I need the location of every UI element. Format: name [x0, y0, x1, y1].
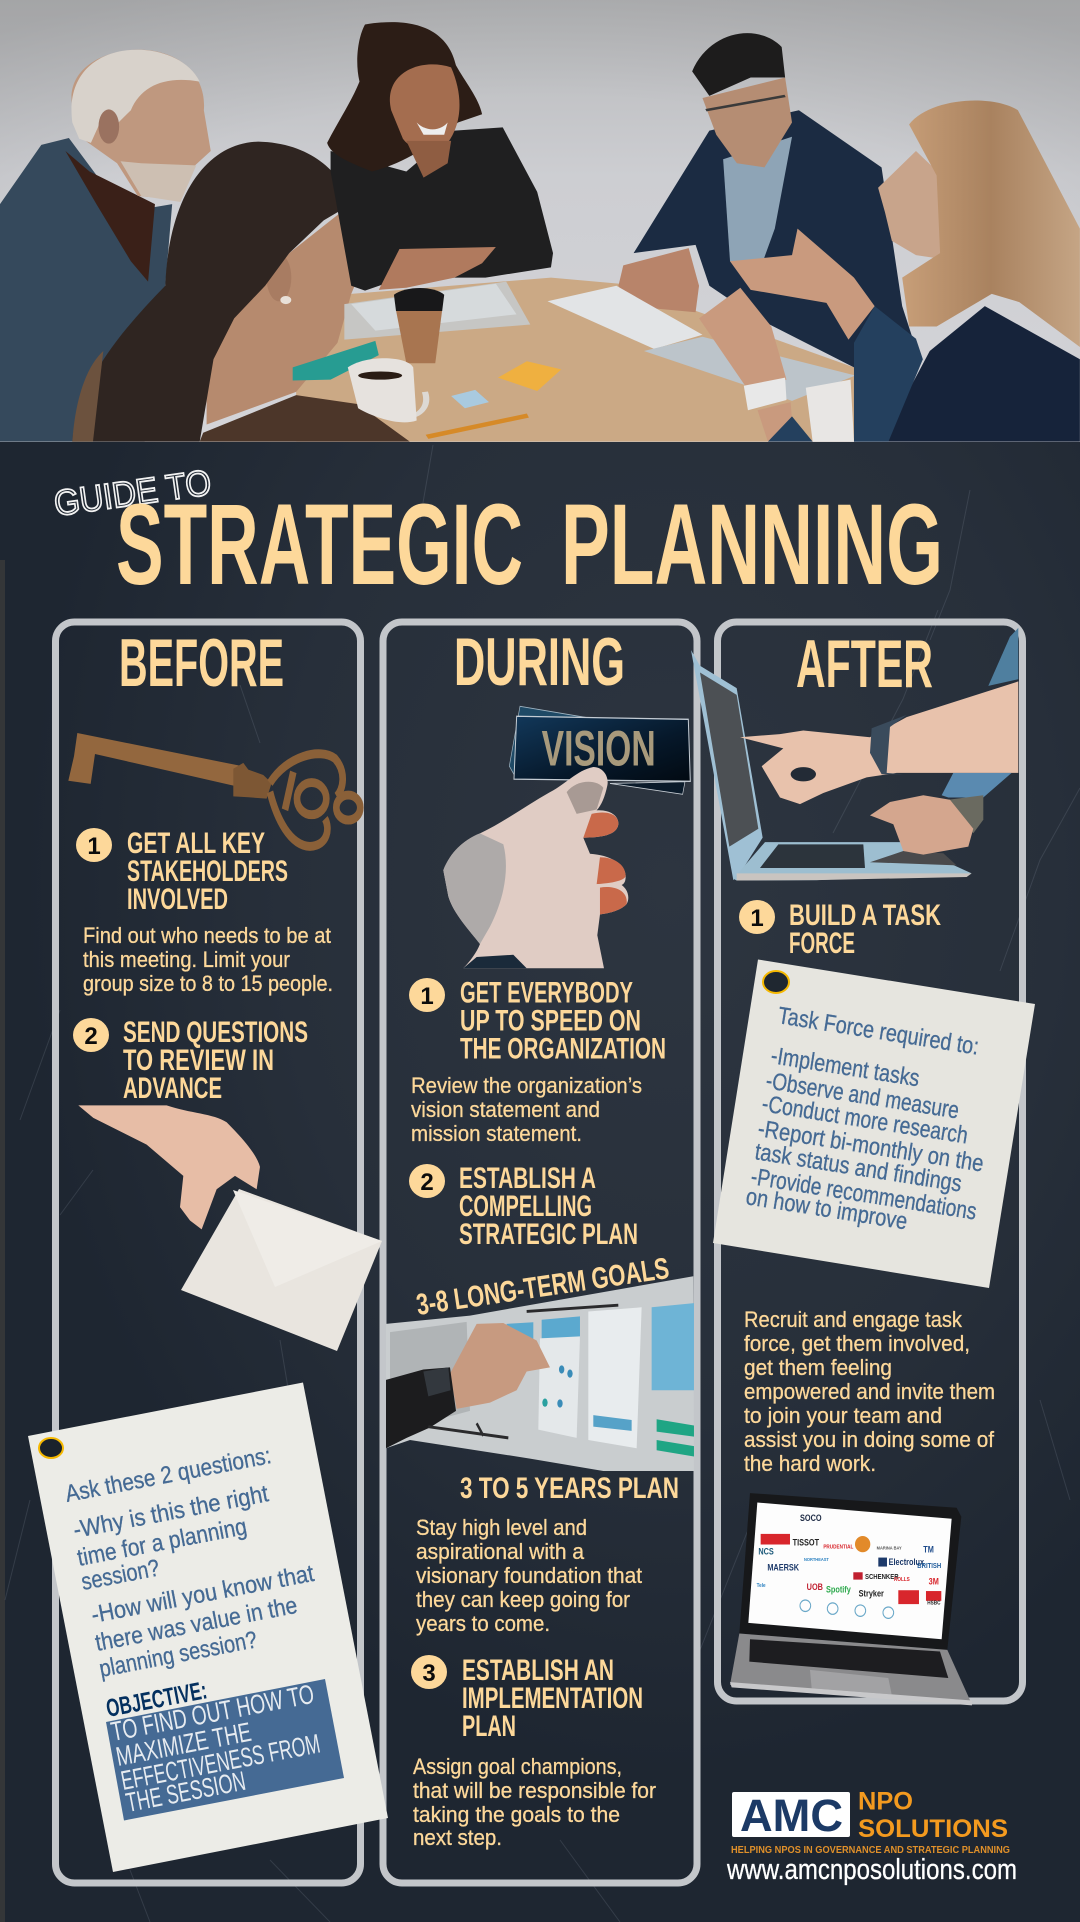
subheading: 3 to 5 years plan: 3 TO 5 YEARS PLAN	[460, 1472, 679, 1505]
step 2 heading: ESTABLISH A	[459, 1162, 596, 1195]
body: recruit and engage: assist you in doing some of	[744, 1427, 995, 1452]
papers and cups on table	[293, 282, 855, 442]
body: recruit and engage: empowered and invite them	[744, 1379, 995, 1404]
image: hand holding vision card: VISION	[542, 722, 656, 776]
note questions: time for a planning	[75, 1513, 249, 1572]
step 1 badge: 1	[750, 905, 764, 932]
icon: antique key	[68, 733, 360, 846]
step 2 heading	[123, 1016, 308, 1105]
logo wordmark: AMC	[740, 1790, 843, 1841]
step 1 heading: THE ORGANIZATION	[460, 1032, 666, 1066]
note: task force required	[713, 960, 1035, 1288]
pin hole	[763, 971, 789, 993]
objective label: OBJECTIVE:	[104, 1676, 209, 1723]
pin hole	[39, 1438, 63, 1458]
step 1 heading	[460, 976, 666, 1066]
step 1 badge	[739, 900, 775, 934]
title word: strategic: STRATEGIC	[116, 481, 523, 609]
objective box: EFFECTIVENESS FROM	[119, 1729, 323, 1796]
step 1 badge	[76, 828, 112, 862]
step 3 body: next step.	[413, 1825, 502, 1850]
image: hand holding envelope	[78, 1105, 382, 1351]
image: laptop showing client logos: Spotify	[826, 1585, 851, 1594]
step 2 badge	[409, 1164, 445, 1198]
step 1 body	[83, 923, 333, 996]
image: laptop showing client logos: ROLLS	[894, 1577, 910, 1583]
image: laptop showing client logos: Stryker	[859, 1589, 885, 1599]
plan body: they can keep going for	[416, 1587, 630, 1612]
body: recruit and engage: get them feeling	[744, 1355, 892, 1380]
note: questions to ask	[28, 1382, 388, 1872]
objective box: THE SESSION	[124, 1766, 248, 1818]
objective box: TO FIND OUT HOW TO	[109, 1679, 316, 1747]
step 2 badge: 2	[84, 1023, 98, 1050]
panel: after	[691, 622, 1035, 1705]
title	[51, 461, 943, 609]
step 2 heading	[459, 1162, 638, 1251]
logo text: solutions: SOLUTIONS	[858, 1815, 1008, 1843]
note questions: session?	[79, 1555, 162, 1596]
woman on right, blond hair	[699, 101, 1080, 442]
image: laptop showing client logos: 3M	[929, 1577, 939, 1587]
image: laptop showing client logos: NCS	[758, 1547, 774, 1557]
note list: task status and findings	[753, 1138, 964, 1198]
image: hand holding vision card	[443, 706, 690, 968]
heading: during: DURING	[454, 624, 625, 700]
image: laptop showing client logos: PRUDENTIAL	[823, 1544, 854, 1551]
plan body: Stay high level and	[416, 1515, 587, 1540]
step 2 heading: TO REVIEW IN	[123, 1044, 274, 1077]
step 1 heading: GET ALL KEY	[127, 827, 265, 860]
image: laptop showing client logos: MAERSK	[767, 1563, 799, 1573]
step 1 body: Review the organization’s	[411, 1073, 642, 1098]
step 3 heading: ESTABLISH AN	[462, 1654, 614, 1687]
step 2 badge: 2	[420, 1169, 434, 1196]
note list: -Report bi-monthly on the	[756, 1115, 985, 1178]
panel: during	[383, 622, 697, 1883]
panel border: after	[718, 622, 1022, 1701]
note list: on how to improve	[744, 1183, 909, 1235]
man on right	[618, 33, 919, 442]
note list: -Implement tasks	[769, 1042, 921, 1092]
note paper	[28, 1382, 388, 1872]
step 1 badge	[409, 978, 445, 1012]
step 1 body: group size to 8 to 15 people.	[83, 971, 333, 996]
body: recruit and engage	[744, 1307, 995, 1476]
step 3 badge: 3	[422, 1660, 436, 1687]
note list: -Provide recommendations	[749, 1163, 978, 1226]
step 3 body: that will be responsible for	[413, 1778, 656, 1803]
label: long-term goals: 3-8 LONG-TERM GOALS	[414, 1252, 671, 1322]
step 2 heading: SEND QUESTIONS	[123, 1016, 308, 1049]
image: laptop showing client logos: SCHENKER	[865, 1573, 899, 1581]
note questions: Ask these 2 questions:	[63, 1442, 273, 1508]
step 3 heading	[462, 1654, 643, 1743]
image: laptop showing client logos	[730, 1493, 972, 1705]
step 1 body: mission statement.	[411, 1121, 582, 1146]
title line: guide to: GUIDE TO	[51, 461, 214, 524]
man on left	[0, 50, 211, 442]
image: laptop showing client logos: HSBC	[927, 1600, 941, 1607]
step 3 heading: PLAN	[462, 1710, 516, 1743]
step 2 badge	[73, 1018, 109, 1052]
step 3 body	[413, 1754, 656, 1850]
step 3 body: Assign goal champions,	[413, 1754, 622, 1779]
step 1 body: this meeting. Limit your	[83, 947, 290, 972]
objective box: MAXIMIZE THE	[114, 1717, 254, 1772]
step 1 heading: GET EVERYBODY	[460, 976, 633, 1010]
body: recruit and engage: to join your team and	[744, 1403, 942, 1428]
tagline: HELPING NPOS IN GOVERNANCE AND STRATEGIC PLANNING	[731, 1844, 1010, 1856]
image: laptop showing client logos: BRITISH	[917, 1562, 941, 1570]
woman in centre	[327, 22, 553, 291]
note questions: planning session?	[97, 1626, 259, 1683]
heading: before: BEFORE	[119, 625, 284, 701]
note questions: -How will you know that	[89, 1560, 316, 1629]
logo badge	[732, 1792, 850, 1837]
body: recruit and engage: force, get them involved,	[744, 1331, 970, 1356]
note list: Task Force required to:	[776, 1002, 981, 1061]
plan body: aspirational with a	[416, 1539, 585, 1564]
image: laptop showing client logos: Tele	[757, 1583, 766, 1589]
step 1 badge: 1	[87, 833, 101, 860]
objective box	[106, 1679, 344, 1820]
image: hand pinning plans on a board	[386, 1276, 694, 1471]
website: www.amcnposolutions.com	[726, 1854, 1017, 1886]
step 1 body: vision statement and	[411, 1097, 600, 1122]
step 3 heading: IMPLEMENTATION	[462, 1682, 643, 1715]
image: laptop showing client logos: TM	[923, 1545, 934, 1555]
image: laptop showing client logos: UOB	[807, 1583, 823, 1592]
step 1 heading: FORCE	[789, 927, 855, 960]
image: laptop showing client logos: TISSOT	[793, 1538, 819, 1548]
step 3 badge	[411, 1655, 447, 1689]
step 1 heading: STAKEHOLDERS	[127, 855, 288, 888]
panel: before	[28, 622, 388, 1883]
step 1 body	[411, 1073, 642, 1146]
step 1 heading: UP TO SPEED ON	[460, 1004, 641, 1038]
step 3 body: taking the goals to the	[413, 1802, 620, 1827]
image: laptop showing client logos: MARINA BAY	[877, 1545, 902, 1551]
step 1 heading	[127, 827, 288, 916]
heading: after: AFTER	[796, 626, 933, 702]
image: hands pointing at laptop	[691, 628, 1018, 881]
step 1 heading: INVOLVED	[127, 883, 228, 916]
logo text: NPO: NPO	[858, 1788, 913, 1816]
plan body: years to come.	[416, 1611, 550, 1636]
panel border: during	[383, 622, 697, 1883]
note list: -Conduct more research	[760, 1090, 970, 1149]
step 2 heading: STRATEGIC PLAN	[459, 1218, 638, 1251]
image: laptop showing client logos: NORTHEAST	[804, 1556, 829, 1562]
note questions	[63, 1442, 316, 1683]
note list: -Observe and measure	[764, 1067, 961, 1124]
background: chalkboard	[0, 442, 1080, 1922]
note questions: -Why is this the right	[71, 1480, 271, 1544]
body: recruit and engage: the hard work.	[744, 1451, 876, 1476]
step 1 heading: BUILD A TASK	[789, 899, 941, 932]
photo: team meeting around table	[0, 0, 1080, 442]
step 1 body: Find out who needs to be at	[83, 923, 331, 948]
step 1 heading	[789, 899, 941, 960]
logo: AMC NPO Solutions	[726, 1788, 1017, 1886]
note questions: there was value in the	[93, 1592, 299, 1657]
step 2 heading: ADVANCE	[123, 1072, 222, 1105]
table	[296, 278, 854, 442]
panel border: before	[56, 622, 360, 1883]
step 1 badge: 1	[420, 983, 434, 1010]
plan body	[416, 1515, 642, 1636]
plan body: visionary foundation that	[416, 1563, 642, 1588]
note paper	[713, 960, 1035, 1288]
note list	[744, 1002, 985, 1235]
woman with dark ponytail	[72, 142, 410, 442]
step 2 heading: COMPELLING	[459, 1190, 592, 1223]
image: laptop showing client logos: Electrolux	[889, 1557, 924, 1567]
body: recruit and engage: Recruit and engage task	[744, 1307, 963, 1332]
image: laptop showing client logos: SOCO	[800, 1513, 822, 1523]
